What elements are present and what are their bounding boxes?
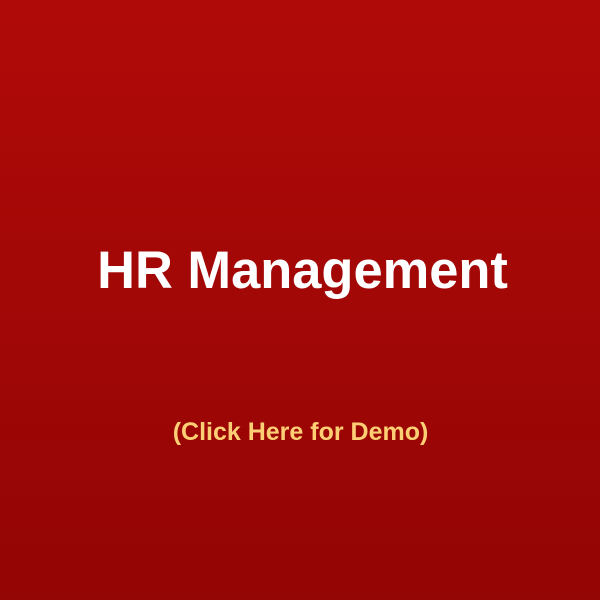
call to action text: (Click Here for Demo) [173,418,428,446]
title: HR Management [97,242,508,300]
